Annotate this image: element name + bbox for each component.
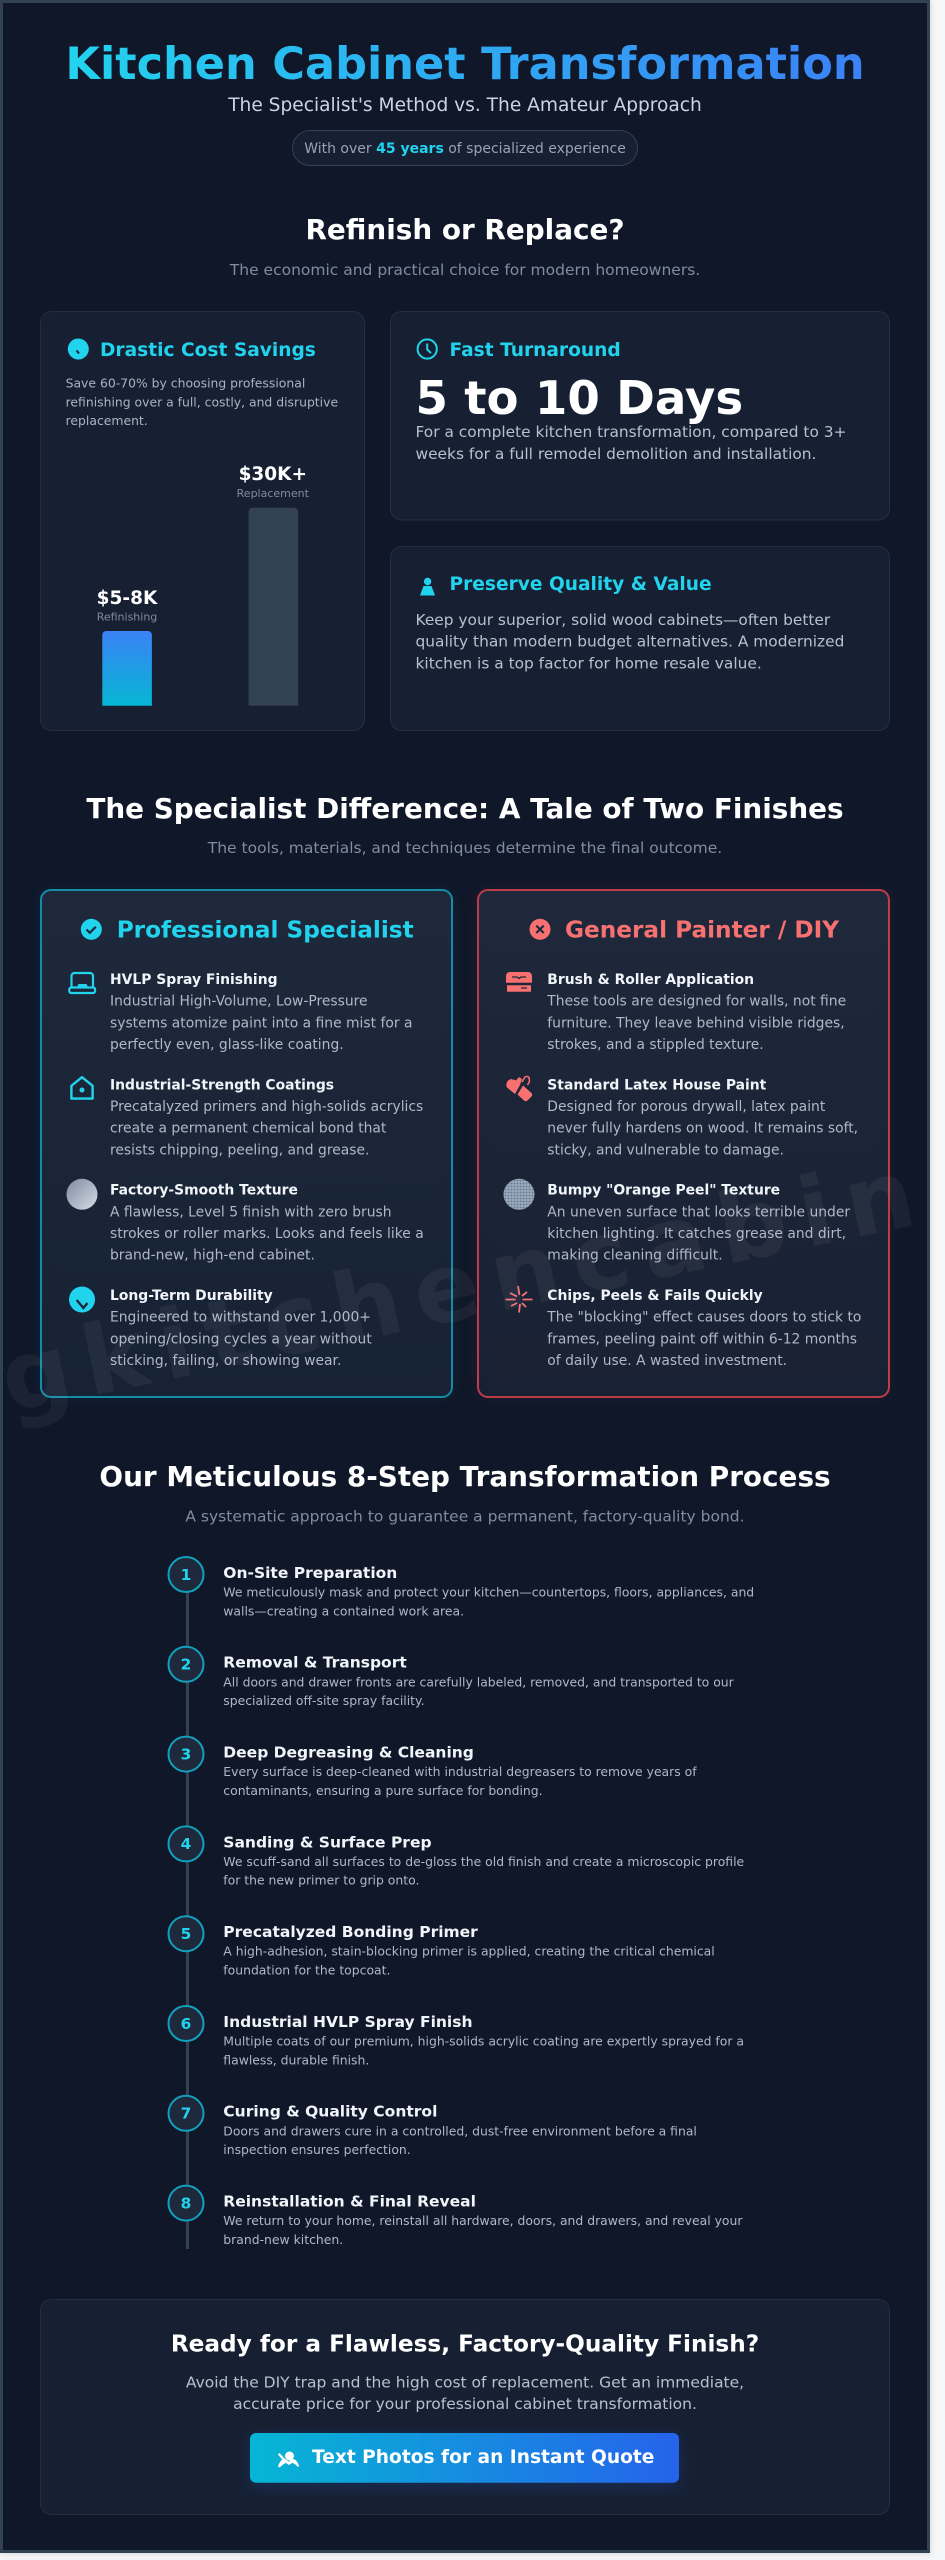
- step 5: A high-adhesion, stain-blocking primer is applied, creating the critical chemical: [223, 1944, 715, 1959]
- item: brush and roller: [506, 972, 846, 1053]
- step 2: Removal & Transport: [223, 1654, 407, 1672]
- item: latex paint: sticky, and vulnerable to damage.: [547, 1142, 784, 1158]
- item: smooth texture: Factory-Smooth Texture: [110, 1183, 298, 1199]
- step 8: 8: [181, 2194, 191, 2212]
- bar: refinishing: Refinishing: [97, 611, 157, 624]
- card text: Keep your superior, solid wood cabinets—often better: [416, 611, 831, 629]
- step 4: [168, 1826, 744, 1888]
- item: coatings: create a permanent chemical bond that: [110, 1121, 387, 1137]
- section heading: refinish or replace: Refinish or Replace?: [305, 213, 625, 246]
- card text: weeks for a full remodel demolition and installation.: [416, 445, 816, 463]
- item: latex paint: [506, 1076, 858, 1158]
- item: durability: Engineered to withstand over 1,000+: [110, 1310, 371, 1326]
- item: smooth texture: [66, 1179, 424, 1264]
- icon: x circle: [530, 919, 550, 940]
- bar: replacement: $30K+: [239, 464, 307, 485]
- header: [65, 38, 865, 166]
- item: durability: Long-Term Durability: [110, 1288, 273, 1304]
- item: orange peel: making cleaning difficult.: [547, 1248, 723, 1264]
- item: hvlp: [69, 972, 412, 1053]
- bar: refinishing: $5-8K: [97, 588, 158, 609]
- item: brush and roller: strokes, and a stippled texture.: [547, 1037, 764, 1053]
- card text: replacement.: [66, 413, 148, 428]
- item: coatings: resists chipping, peeling, and grease.: [110, 1142, 369, 1158]
- item: smooth texture: A flawless, Level 5 finish with zero brush: [110, 1204, 392, 1220]
- step 7: Curing & Quality Control: [223, 2103, 437, 2121]
- step 6: [168, 2006, 744, 2067]
- bar: replacement: [237, 464, 310, 706]
- cta text: Avoid the DIY trap and the high cost of replacement. Get an immediate,: [186, 2373, 744, 2391]
- step 1: 1: [181, 1566, 191, 1584]
- step 6: 6: [181, 2015, 191, 2033]
- item: smooth texture: brand-new, high-end cabinet.: [110, 1248, 315, 1264]
- icon: clock: [418, 339, 437, 359]
- item: orange peel: kitchen lighting. It catches grease and dirt,: [547, 1226, 846, 1242]
- item: hvlp: Industrial High-Volume, Low-Pressure: [110, 994, 368, 1010]
- item: hvlp: HVLP Spray Finishing: [110, 972, 278, 988]
- panel heading: General Painter / DIY: [565, 916, 840, 943]
- item: durability: sticking, failing, or showing wear.: [110, 1353, 341, 1369]
- item: coatings: [71, 1077, 423, 1158]
- step 7: inspection ensures perfection.: [223, 2142, 411, 2157]
- step 2: specialized off-site spray facility.: [223, 1693, 425, 1708]
- item: hvlp: systems atomize paint into a fine mist for a: [110, 1015, 412, 1031]
- step 1: walls—creating a contained work area.: [223, 1603, 464, 1618]
- step 8: We return to your home, reinstall all hardware, doors, and drawers, and reveal your: [223, 2213, 743, 2228]
- card text: Save 60-70% by choosing professional: [66, 376, 305, 391]
- bar: replacement: Replacement: [237, 487, 310, 500]
- item: chips and peels: frames, peeling paint off within 6-12 months: [547, 1331, 857, 1347]
- timeline: 8-step process: [168, 1557, 754, 2249]
- item: durability: opening/closing cycles a year without: [110, 1331, 372, 1347]
- step 5: Precatalyzed Bonding Primer: [223, 1923, 478, 1941]
- panel: drastic cost savings: [40, 312, 364, 730]
- step 5: 5: [181, 1925, 191, 1943]
- step 3: Deep Degreasing & Cleaning: [223, 1744, 474, 1762]
- step 1: We meticulously mask and protect your kitchen—countertops, floors, appliances, and: [223, 1584, 754, 1600]
- step 4: We scuff-sand all surfaces to de-gloss the old finish and create a microscopic profile: [223, 1854, 744, 1869]
- card text: For a complete kitchen transformation, compared to 3+: [416, 423, 846, 441]
- step 4: 4: [181, 1835, 191, 1853]
- step 8: [168, 2186, 743, 2247]
- icon: person with chat: [278, 2452, 299, 2468]
- step 2: 2: [181, 1656, 191, 1674]
- card text: refinishing over a full, costly, and disruptive: [66, 394, 338, 409]
- item: chips and peels: [506, 1286, 861, 1369]
- item: coatings: Industrial-Strength Coatings: [110, 1077, 334, 1093]
- card heading: Preserve Quality & Value: [450, 574, 712, 595]
- section heading: specialist difference: [86, 792, 844, 857]
- step 3: Every surface is deep-cleaned with industrial degreasers to remove years of: [223, 1764, 697, 1779]
- step 1: [168, 1557, 754, 1618]
- panel heading: Professional Specialist: [117, 916, 414, 943]
- item: orange peel: Bumpy "Orange Peel" Texture: [547, 1183, 780, 1199]
- big number: 5 to 10 Days: [416, 372, 743, 426]
- step 1: On-Site Preparation: [223, 1564, 397, 1582]
- panel: professional specialist: [41, 890, 452, 1397]
- step 6: Multiple coats of our premium, high-solids acrylic coating are expertly sprayed for a: [223, 2034, 744, 2048]
- panel: general painter: [478, 890, 889, 1397]
- cta button: [250, 2433, 679, 2487]
- item: hvlp: perfectly even, glass-like coating.: [110, 1037, 344, 1053]
- timeline line: [186, 1574, 189, 2249]
- section heading: specialist difference: The Specialist Difference: A Tale of Two Finishes: [86, 792, 844, 825]
- item: chips and peels: The "blocking" effect causes doors to stick to: [546, 1310, 861, 1326]
- experience badge: With over 45 years of specialized experience: [304, 141, 626, 157]
- step 3: 3: [181, 1745, 191, 1763]
- item: chips and peels: of daily use. A wasted investment.: [547, 1353, 787, 1369]
- cta button: Text Photos for an Instant Quote: [312, 2447, 654, 2468]
- card heading: Fast Turnaround: [450, 340, 621, 361]
- step 4: for the new primer to grip onto.: [223, 1873, 419, 1888]
- item: chips and peels: Chips, Peels & Fails Quickly: [547, 1288, 763, 1304]
- section heading: process: A systematic approach to guarantee a permanent, factory-quality bond.: [185, 1508, 745, 1526]
- section heading: specialist difference: The tools, materials, and techniques determine the final outcome.: [207, 839, 722, 857]
- card text: kitchen is a top factor for home resale value.: [416, 654, 762, 672]
- item: latex paint: never fully hardens on wood. It remains soft,: [547, 1121, 858, 1137]
- bar: refinishing: [97, 588, 158, 706]
- item: latex paint: Designed for porous drywall, latex paint: [547, 1099, 826, 1115]
- item: brush and roller: Brush & Roller Application: [547, 972, 754, 988]
- experience badge: [292, 130, 638, 166]
- panel: fast turnaround: [390, 312, 890, 520]
- step 2: All doors and drawer fronts are carefully labeled, removed, and transported to our: [223, 1674, 735, 1689]
- icon: check circle: [81, 919, 102, 940]
- bar chart: [97, 464, 310, 706]
- item: coatings: Precatalyzed primers and high-solids acrylics: [110, 1099, 423, 1115]
- subtitle: The Specialist's Method vs. The Amateur Approach: [227, 95, 702, 116]
- step 2: [168, 1647, 735, 1708]
- step 6: flawless, durable finish.: [223, 2052, 369, 2067]
- step 8: brand-new kitchen.: [223, 2232, 343, 2247]
- step 5: foundation for the topcoat.: [223, 1962, 390, 1978]
- cta text: accurate price for your professional cabinet transformation.: [233, 2395, 697, 2413]
- icon: savings gauge: [68, 338, 89, 360]
- item: orange peel: An uneven surface that looks terrible under: [547, 1204, 850, 1220]
- step 5: [168, 1916, 715, 1978]
- panel: preserve quality and value: [390, 546, 890, 730]
- section heading: refinish or replace: The economic and practical choice for modern homeowners.: [229, 261, 700, 279]
- section heading: process: [99, 1460, 831, 1526]
- item: latex paint: Standard Latex House Paint: [547, 1077, 767, 1093]
- step 6: Industrial HVLP Spray Finish: [223, 2013, 473, 2031]
- step 3: contaminants, ensuring a pure surface for bonding.: [223, 1783, 543, 1798]
- panel: call to action: [40, 2300, 890, 2514]
- item: orange peel: [504, 1179, 850, 1264]
- item: durability: [69, 1286, 372, 1369]
- card text: quality than modern budget alternatives. A modernized: [416, 633, 844, 651]
- step 7: 7: [181, 2105, 191, 2123]
- step 7: Doors and drawers cure in a controlled, dust-free environment before a final: [223, 2123, 697, 2138]
- card heading: Drastic Cost Savings: [100, 340, 316, 361]
- step 4: Sanding & Surface Prep: [223, 1833, 432, 1851]
- icon: person: [420, 578, 435, 596]
- item: smooth texture: strokes or roller marks. Looks and feels like a: [110, 1226, 424, 1242]
- section heading: refinish or replace: [229, 213, 700, 279]
- item: brush and roller: furniture. They leave behind visible ridges,: [547, 1015, 845, 1031]
- title: Kitchen Cabinet Transformation: [65, 38, 865, 90]
- step 7: [168, 2096, 697, 2157]
- step 3: [168, 1737, 697, 1798]
- section heading: process: Our Meticulous 8-Step Transformation Process: [99, 1460, 831, 1493]
- cta heading: Ready for a Flawless, Factory-Quality Finish?: [171, 2331, 759, 2358]
- step 8: Reinstallation & Final Reveal: [223, 2192, 476, 2210]
- item: brush and roller: These tools are designed for walls, not fine: [546, 994, 846, 1010]
